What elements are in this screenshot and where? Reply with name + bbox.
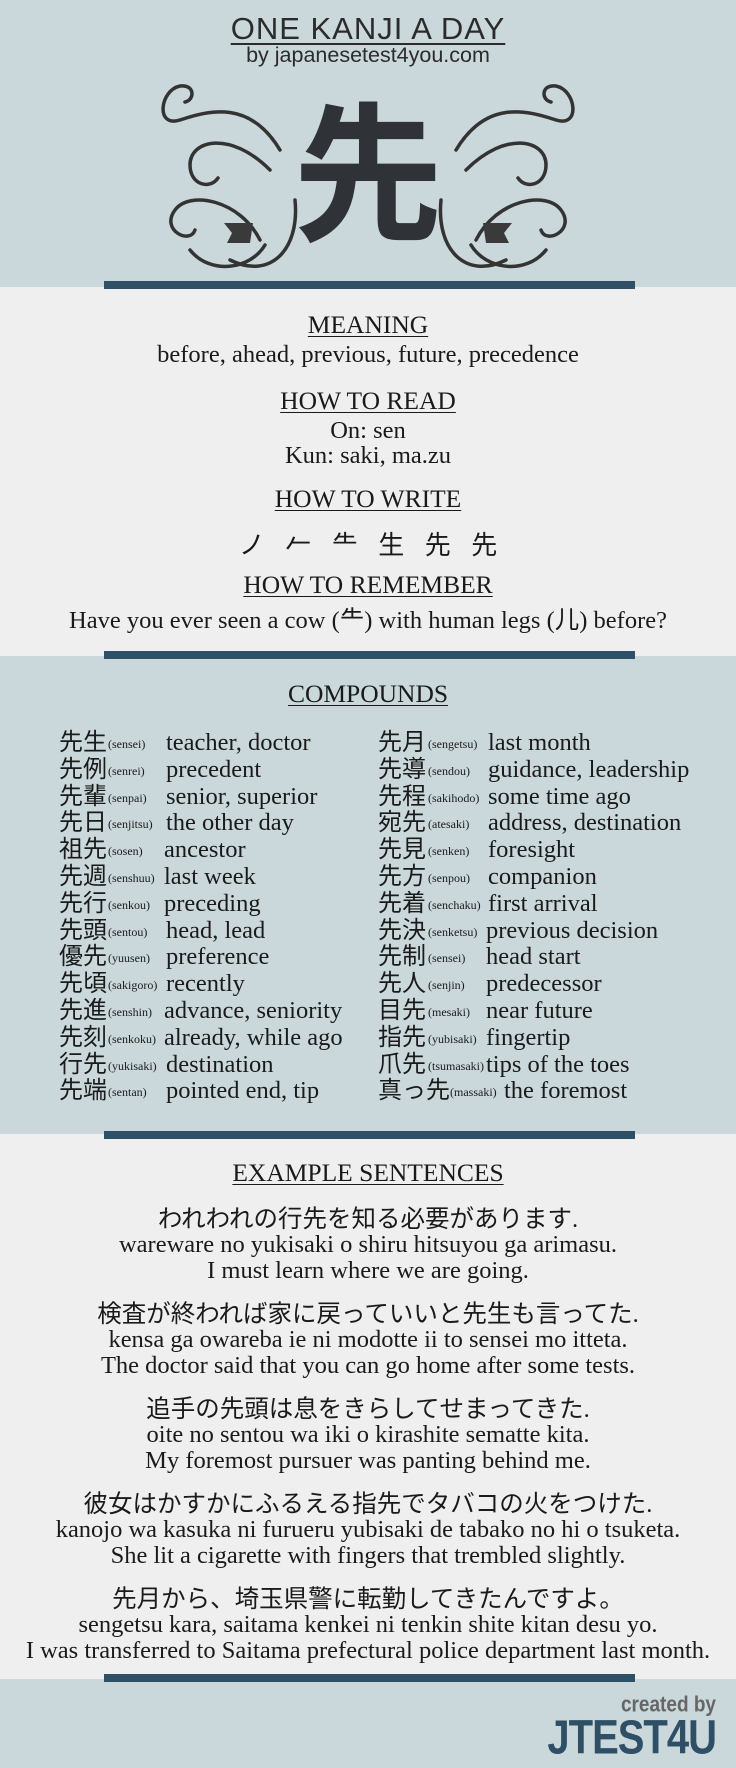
how to read: HOW TO READ bbox=[280, 386, 456, 415]
compounds list right: 目先 bbox=[378, 997, 426, 1024]
text: The doctor said that you can go home after some tests. bbox=[101, 1352, 635, 1379]
compounds list right: fingertip bbox=[486, 1024, 570, 1051]
text: oite no sentou wa iki o kirashite sematte kita. bbox=[147, 1421, 589, 1448]
compounds list right: (sakihodo) bbox=[428, 791, 479, 805]
compounds list right: 先方 bbox=[378, 863, 426, 890]
compounds list left: senior, superior bbox=[166, 783, 317, 810]
compounds list left: advance, seniority bbox=[164, 997, 342, 1024]
text: My foremost pursuer was panting behind me. bbox=[145, 1447, 591, 1474]
subtitle: by japanesetest4you.com bbox=[246, 43, 490, 67]
how to write: HOW TO WRITE bbox=[275, 484, 461, 513]
text: kanojo wa kasuka ni furueru yubisaki de tabako no hi o tsuketa. bbox=[56, 1516, 680, 1543]
compounds list right: 指先 bbox=[378, 1024, 426, 1051]
example sentences: I must learn where we are going. bbox=[207, 1257, 529, 1284]
compounds list left: 先頃 bbox=[59, 970, 107, 997]
compounds list right: (senjin) bbox=[428, 978, 465, 992]
compounds list left: already, while ago bbox=[164, 1024, 343, 1051]
compounds list right: companion bbox=[488, 863, 597, 890]
compounds list left: head, lead bbox=[166, 917, 265, 944]
text: 追手の先頭は息をきらしてせまってきた. bbox=[146, 1396, 590, 1423]
big kanji: 先 bbox=[293, 56, 443, 273]
compounds list right: (senchaku) bbox=[428, 898, 481, 912]
compounds list right: 先着 bbox=[378, 890, 426, 917]
compounds list right bbox=[378, 729, 689, 1104]
compounds list left: 行先 bbox=[59, 1051, 107, 1078]
compounds list left: (senshuu) bbox=[108, 871, 155, 885]
compounds list right: address, destination bbox=[488, 809, 681, 836]
text: On: sen bbox=[330, 417, 406, 444]
compounds list right: (sendou) bbox=[428, 764, 470, 778]
compounds list right: head start bbox=[486, 943, 581, 970]
compounds list left: 先刻 bbox=[59, 1024, 107, 1051]
compounds list left: ancestor bbox=[164, 836, 246, 863]
compounds list left: 先進 bbox=[59, 997, 107, 1024]
compounds list right: 爪先 bbox=[378, 1051, 426, 1078]
compounds list left: 先日 bbox=[59, 809, 107, 836]
compounds list right: (sengetsu) bbox=[428, 737, 477, 751]
text: Kun: saki, ma.zu bbox=[285, 442, 451, 469]
compounds list left: (sentou) bbox=[108, 925, 147, 939]
compounds list left: teacher, doctor bbox=[166, 729, 311, 756]
example sentences: われわれの行先を知る必要があります. bbox=[158, 1206, 578, 1233]
compounds list right: (sensei) bbox=[428, 951, 465, 965]
how to remember: HOW TO REMEMBER bbox=[243, 570, 493, 599]
compounds list right: predecessor bbox=[486, 970, 602, 997]
compounds list right: 宛先 bbox=[378, 809, 426, 836]
compounds list left: precedent bbox=[166, 756, 261, 783]
logo: created by JTEST4U: created by bbox=[621, 1693, 716, 1717]
compounds list right: (senpou) bbox=[428, 871, 470, 885]
compounds list right: 先人 bbox=[378, 970, 426, 997]
text: 検査が終われば家に戻っていいと先生も言ってた. bbox=[97, 1301, 639, 1328]
ornament swirls bbox=[161, 84, 575, 268]
compounds list right: 先月 bbox=[378, 729, 426, 756]
compounds background bbox=[0, 656, 736, 1134]
compounds list right: (senketsu) bbox=[428, 925, 477, 939]
compounds list right: last month bbox=[488, 729, 591, 756]
compounds list right: 真っ先 bbox=[378, 1077, 450, 1104]
footer background bbox=[0, 1679, 736, 1768]
compounds heading: COMPOUNDS bbox=[288, 679, 448, 708]
compounds list left: destination bbox=[166, 1051, 274, 1078]
text: Have you ever seen a cow (⺧) with human legs (儿) before? bbox=[69, 607, 667, 634]
compounds list right: (mesaki) bbox=[428, 1005, 470, 1019]
compounds list left: preference bbox=[166, 943, 269, 970]
compounds list left: 先行 bbox=[59, 890, 107, 917]
compounds list right: (yubisaki) bbox=[428, 1032, 477, 1046]
compounds list right: foresight bbox=[488, 836, 575, 863]
example sentences: wareware no yukisaki o shiru hitsuyou ga arimasu. bbox=[119, 1231, 617, 1258]
example sentences bbox=[119, 1206, 617, 1284]
compounds list right: first arrival bbox=[488, 890, 598, 917]
meaning: MEANING bbox=[308, 310, 428, 339]
compounds list left: 先週 bbox=[59, 863, 107, 890]
compounds list left: (sentan) bbox=[108, 1085, 147, 1099]
compounds list right: near future bbox=[486, 997, 593, 1024]
compounds list left: (senshin) bbox=[108, 1005, 152, 1019]
title: ONE KANJI A DAY bbox=[231, 11, 505, 46]
compounds list left: (senkou) bbox=[108, 898, 150, 912]
compounds list left: (yuusen) bbox=[108, 951, 150, 965]
logo: created by JTEST4U: JTEST4U bbox=[547, 1711, 716, 1764]
text: ノ 𠂉 ⺧ 生 先 先 bbox=[239, 531, 497, 560]
compounds list left: pointed end, tip bbox=[166, 1077, 319, 1104]
compounds list right: 先導 bbox=[378, 756, 426, 783]
header background bbox=[0, 0, 736, 287]
compounds list right: the foremost bbox=[504, 1077, 627, 1104]
compounds list left: preceding bbox=[164, 890, 261, 917]
compounds list right: tips of the toes bbox=[486, 1051, 630, 1078]
compounds list left: 先生 bbox=[59, 729, 107, 756]
text: kensa ga owareba ie ni modotte ii to sensei mo itteta. bbox=[108, 1326, 628, 1353]
compounds list right: 先程 bbox=[378, 783, 426, 810]
compounds list right: (tsumasaki) bbox=[428, 1059, 484, 1073]
compounds list left: 先輩 bbox=[59, 783, 107, 810]
compounds list left: (sosen) bbox=[108, 844, 143, 858]
text: I was transferred to Saitama prefectural police department last month. bbox=[26, 1637, 710, 1664]
compounds list right: 先見 bbox=[378, 836, 426, 863]
compounds list right: (massaki) bbox=[450, 1085, 497, 1099]
compounds list left: (senrei) bbox=[108, 764, 145, 778]
compounds list right: guidance, leadership bbox=[488, 756, 689, 783]
text: 先月から、埼玉県警に転勤してきたんですよ。 bbox=[112, 1586, 624, 1613]
compounds list left: (senjitsu) bbox=[108, 817, 153, 831]
compounds list right: previous decision bbox=[486, 917, 658, 944]
compounds list right: 先決 bbox=[378, 917, 426, 944]
compounds list right: 先制 bbox=[378, 943, 426, 970]
text: 彼女はかすかにふるえる指先でタバコの火をつけた. bbox=[84, 1491, 652, 1518]
compounds list left: 優先 bbox=[59, 943, 107, 970]
text: sengetsu kara, saitama kenkei ni tenkin shite kitan desu yo. bbox=[78, 1611, 658, 1638]
compounds list right: (atesaki) bbox=[428, 817, 469, 831]
compounds list right: (senken) bbox=[428, 844, 469, 858]
compounds list left: last week bbox=[164, 863, 256, 890]
compounds list left: (senkoku) bbox=[108, 1032, 156, 1046]
compounds list left: (yukisaki) bbox=[108, 1059, 157, 1073]
compounds list left: 先頭 bbox=[59, 917, 107, 944]
text: before, ahead, previous, future, precedence bbox=[157, 341, 579, 368]
compounds list left: 祖先 bbox=[59, 836, 107, 863]
compounds list left: (sensei) bbox=[108, 737, 145, 751]
compounds list left: recently bbox=[166, 970, 245, 997]
compounds list right: some time ago bbox=[488, 783, 631, 810]
text: She lit a cigarette with fingers that trembled slightly. bbox=[111, 1542, 625, 1569]
compounds list left: (senpai) bbox=[108, 791, 147, 805]
compounds list left: 先例 bbox=[59, 756, 107, 783]
compounds list left: 先端 bbox=[59, 1077, 107, 1104]
compounds list left: the other day bbox=[166, 809, 294, 836]
compounds list left bbox=[59, 729, 343, 1104]
example sentences heading: EXAMPLE SENTENCES bbox=[232, 1158, 504, 1187]
compounds list left: (sakigoro) bbox=[108, 978, 157, 992]
